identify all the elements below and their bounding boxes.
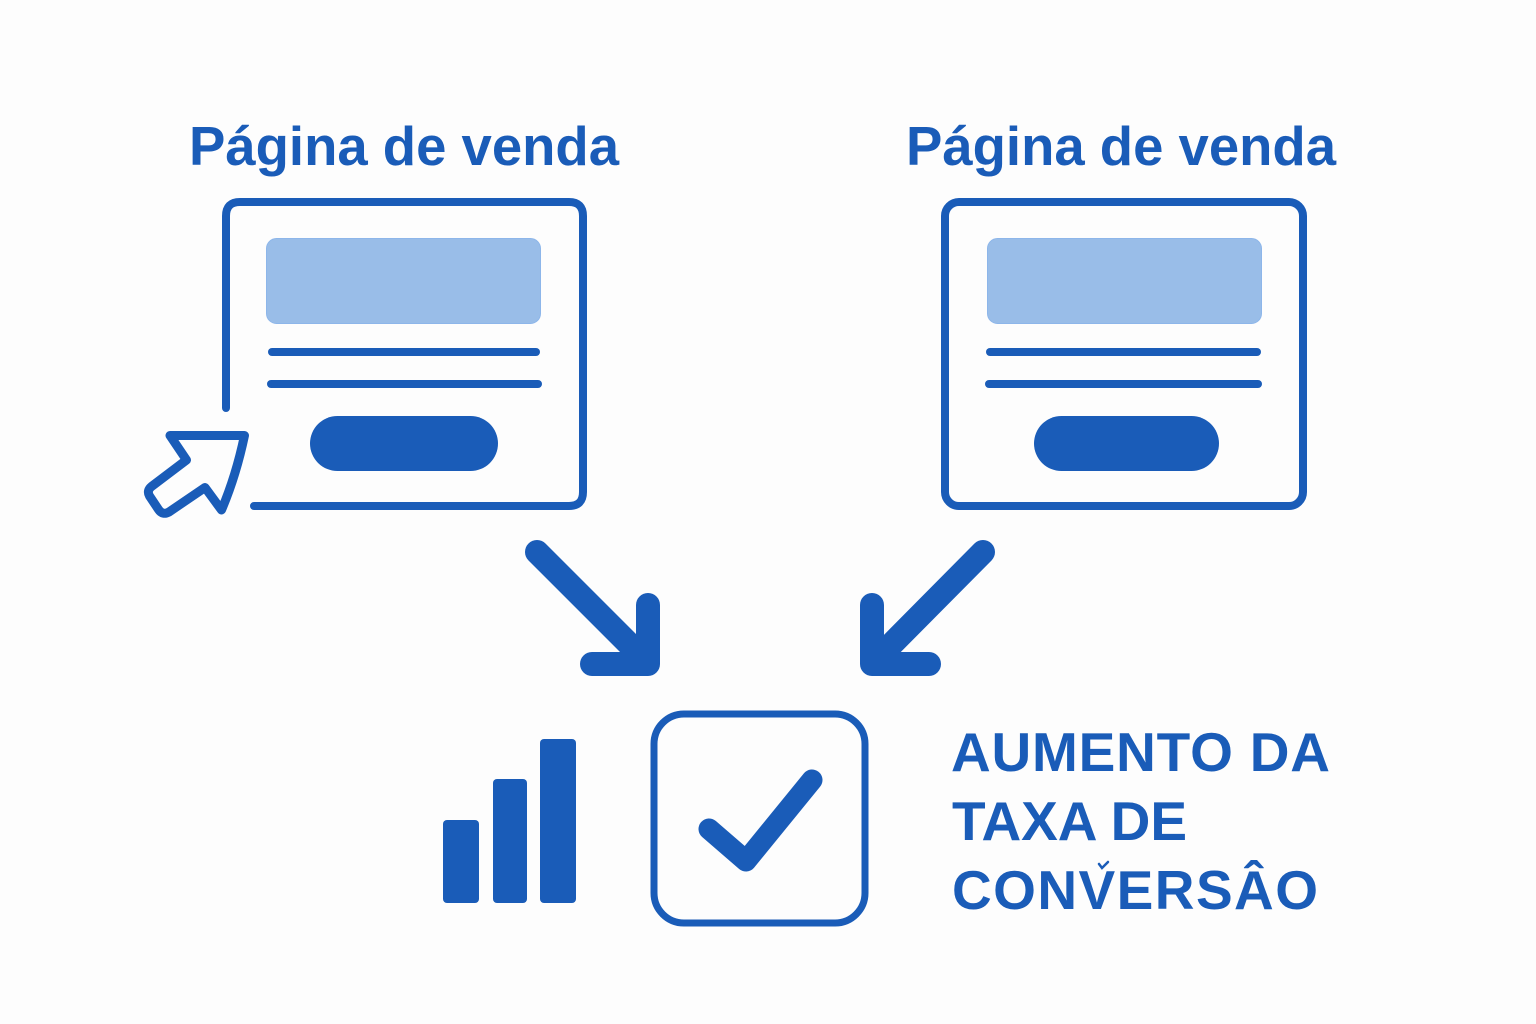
arrow: left page to result xyxy=(537,552,648,664)
result text: AUMENTO DA xyxy=(951,721,1330,783)
icon: checkbox with check mark xyxy=(654,714,865,923)
icon: cursor arrow xyxy=(148,436,244,513)
heading: right page: Página de venda xyxy=(906,115,1336,177)
result text: TAXA DE xyxy=(952,790,1187,852)
text line 2 xyxy=(267,380,542,388)
panel: left sales page xyxy=(226,202,583,506)
page frame with cursor gap xyxy=(226,202,583,506)
page frame xyxy=(945,202,1303,506)
bar chart icon xyxy=(443,739,576,903)
text line 1 xyxy=(986,348,1261,356)
image placeholder xyxy=(988,238,1262,324)
arrow: right page to result xyxy=(872,552,983,664)
heading: left page: Página de venda xyxy=(189,115,619,177)
button xyxy=(1034,416,1219,471)
text line 2 xyxy=(985,380,1262,388)
text line 1 xyxy=(268,348,540,356)
result text: CONVERSÂO xyxy=(952,859,1318,921)
button xyxy=(310,416,498,471)
result text xyxy=(951,721,1330,921)
image placeholder xyxy=(266,238,540,324)
panel: right sales page xyxy=(945,202,1303,506)
